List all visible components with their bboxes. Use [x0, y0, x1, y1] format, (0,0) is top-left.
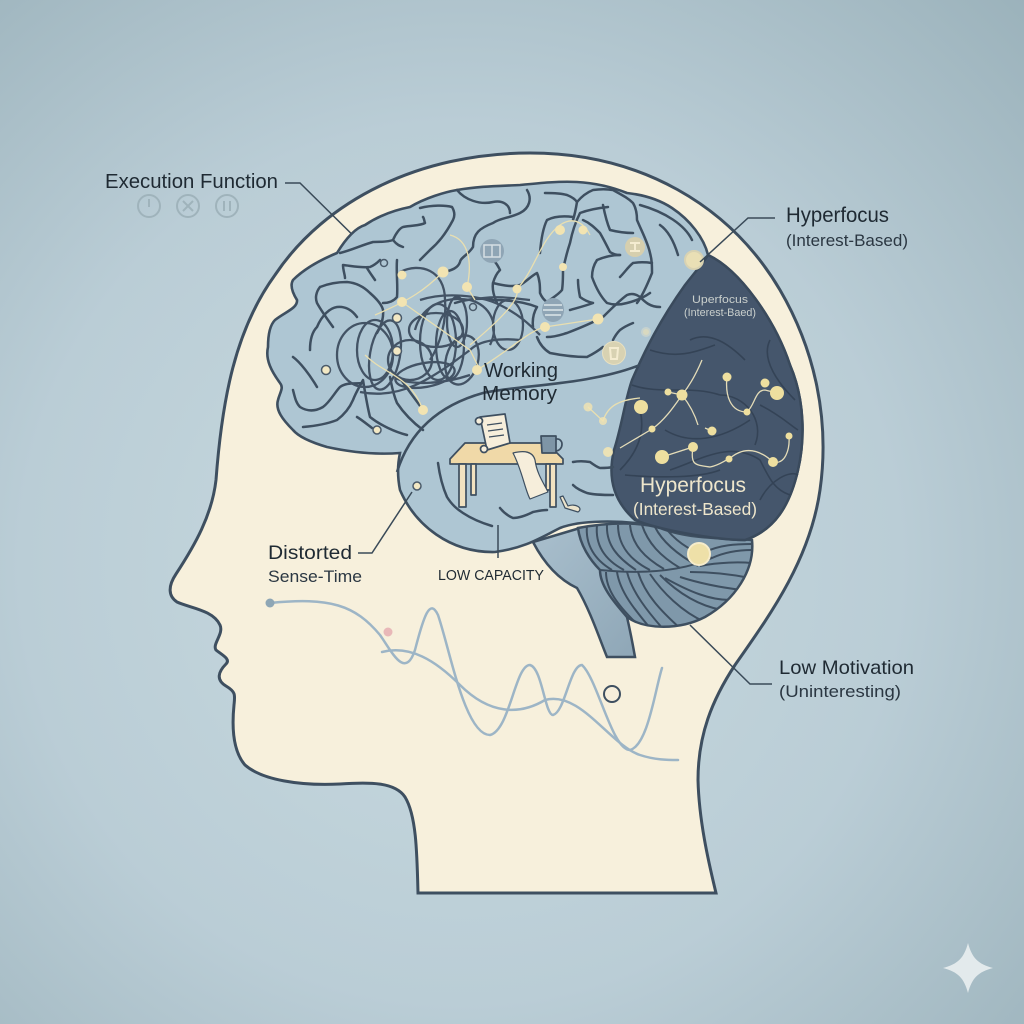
cerebellum node [688, 543, 710, 565]
hyperfocus connector node [685, 251, 703, 269]
label: low capacity [438, 525, 544, 584]
label: distorted sense-time: Sense-Time [268, 567, 362, 586]
icon: sparkle [943, 943, 993, 993]
hyperfocus lobe label [633, 474, 757, 519]
start dot [266, 598, 274, 608]
dark hyperfocus lobe [612, 255, 803, 540]
ring nodes [322, 260, 476, 490]
small hyperfocus label [684, 294, 756, 319]
neural pathways [365, 221, 640, 421]
clip [560, 496, 580, 512]
brainstem [533, 528, 640, 657]
label: distorted sense-time [268, 492, 412, 586]
label: distorted sense-time: Distorted [268, 542, 352, 564]
cerebrum [267, 182, 803, 552]
temporal lobe sulcus [397, 365, 640, 472]
working memory label: Working [484, 360, 558, 382]
cerebellum [578, 524, 752, 630]
icon: puzzle node [625, 237, 645, 257]
brain nodes [397, 225, 613, 457]
hyperfocus lobe label: (Interest-Based) [633, 499, 757, 519]
icon: cup node [602, 342, 626, 364]
label: low capacity: LOW CAPACITY [438, 568, 544, 584]
ring marker [604, 686, 620, 702]
working memory label [482, 360, 558, 405]
label: hyperfocus: Hyperfocus [786, 204, 889, 227]
label: low motivation [690, 625, 914, 701]
label: hyperfocus [700, 204, 908, 262]
ring node near temporal [642, 328, 650, 336]
desk [450, 443, 563, 464]
small hyperfocus label: Uperfocus [692, 294, 749, 306]
icons: executive function [138, 195, 238, 217]
pink marker [384, 628, 392, 636]
mug [541, 436, 556, 453]
paper [513, 452, 548, 499]
icon: book [480, 239, 504, 263]
time waves [266, 598, 678, 760]
desk with scroll and mug [450, 414, 580, 512]
hyperfocus nodes [634, 372, 792, 467]
hyperfocus pathways [620, 360, 789, 467]
working memory label: Memory [482, 383, 557, 405]
head silhouette [170, 153, 823, 893]
cortical folds [293, 189, 692, 526]
tangled working memory loops [337, 268, 540, 394]
label: hyperfocus: (Interest-Based) [786, 232, 908, 250]
label: low motivation: Low Motivation [779, 657, 914, 679]
label: low motivation: (Uninteresting) [779, 682, 901, 701]
scroll [480, 414, 510, 450]
icon: striped oval [542, 298, 564, 322]
small hyperfocus label: (Interest-Baed) [684, 307, 756, 319]
label line: execution function [285, 183, 380, 262]
brain [267, 182, 803, 657]
hyperfocus lobe label: Hyperfocus [640, 474, 746, 497]
label: execution function: Execution Function [105, 170, 278, 193]
